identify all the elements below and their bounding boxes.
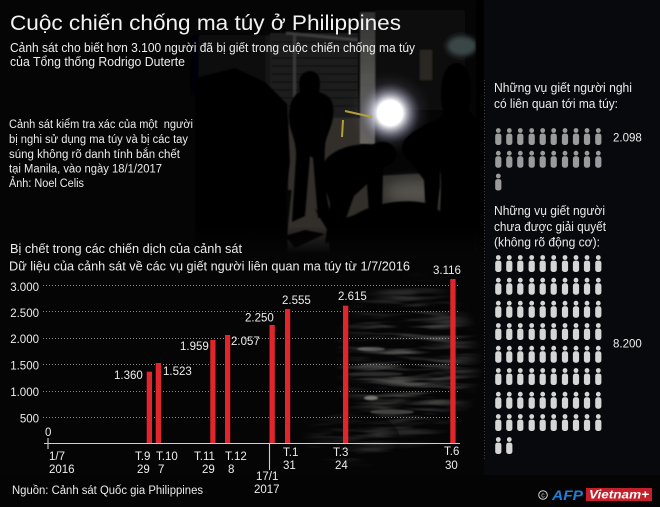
date labels: T.11 <box>194 451 215 463</box>
axis line <box>44 438 460 470</box>
fade photo into chart <box>0 226 484 254</box>
date labels: 29 <box>137 464 150 476</box>
bar value labels: 2.615 <box>338 291 367 303</box>
flashlight glow <box>348 71 432 155</box>
bar value labels: 3.116 <box>433 265 461 277</box>
subtitle: của Tổng thống Rodrigo Duterte <box>10 54 185 69</box>
yellow police tape <box>342 111 372 137</box>
silhouettes of police and the body <box>195 0 484 262</box>
date labels: 24 <box>335 460 348 472</box>
y axis labels <box>10 282 39 426</box>
logos: AFP and Vietnam+: c <box>541 492 545 500</box>
y axis labels: 2.000 <box>10 334 39 346</box>
bar value labels: 1.360 <box>114 370 143 382</box>
bar chart: police operation deaths <box>10 265 461 496</box>
y axis labels: 500 <box>20 414 39 426</box>
photo caption: bị nghi sử dụng ma túy và bị các tay <box>9 134 188 146</box>
heading: unsolved killings: Những vụ giết người <box>494 204 605 218</box>
date labels: T.12 <box>225 451 247 463</box>
heading: drug-related killings <box>494 81 632 111</box>
heading: unsolved killings <box>494 204 606 250</box>
photo caption: Ảnh: Noel Celis <box>9 177 84 190</box>
photo caption: tại Manila, vào ngày 18/1/2017 <box>9 164 162 176</box>
chart heading <box>9 241 410 274</box>
subtitle: Cảnh sát cho biết hơn 3.100 người đã bị giết trong cuộc chiến chống ma túy <box>10 40 415 55</box>
date labels <box>49 446 459 496</box>
value: 2.098: 2.098 <box>613 132 642 144</box>
source note: Nguồn: Cảnh sát Quốc gia Philippines <box>12 485 203 497</box>
heading: drug-related killings: Những vụ giết người nghi <box>494 81 632 95</box>
y axis labels: 1.000 <box>10 387 39 399</box>
pictogram: 2.098 drug-related killings <box>495 128 601 190</box>
bar value labels: 1.523 <box>163 366 192 378</box>
title: Cuộc chiến chống ma túy ở Philippines <box>10 11 401 35</box>
background photo: police at night scene <box>266 12 485 462</box>
date labels: 1/7 <box>49 451 65 463</box>
heading: unsolved killings: (không rõ động cơ): <box>494 236 600 250</box>
bar value labels: 2.057 <box>231 336 260 348</box>
ground texture <box>310 288 478 462</box>
y axis labels: 3.000 <box>10 282 39 294</box>
value: 8.200: 8.200 <box>613 338 642 350</box>
red bars <box>147 279 456 443</box>
chart heading: Dữ liệu của cảnh sát về các vụ giết người liên quan ma túy từ 1/7/2016 <box>9 258 410 274</box>
logos: AFP and Vietnam+ <box>539 487 652 503</box>
pictogram: 8.200 unsolved killings <box>495 255 601 454</box>
subtitle <box>10 40 415 69</box>
date labels: 7 <box>158 464 164 476</box>
heading: drug-related killings: có liên quan tới ma túy: <box>494 97 618 111</box>
date labels: 30 <box>445 460 458 472</box>
bar value labels: 2.555 <box>282 295 311 307</box>
date labels: T.9 <box>135 451 150 463</box>
date labels: 17/1 <box>256 471 278 483</box>
bar value labels: 2.250 <box>245 312 274 324</box>
photo caption: Cảnh sát kiểm tra xác của một người <box>9 119 193 131</box>
photo caption <box>9 119 193 190</box>
photo caption: súng không rõ danh tính bắn chết <box>9 148 181 161</box>
y axis labels: 1.500 <box>10 360 39 372</box>
bar value labels: 1.959 <box>180 341 209 353</box>
date labels: 2016 <box>49 464 75 476</box>
date labels: 29 <box>202 464 215 476</box>
heading: unsolved killings: chưa được giải quyết <box>494 220 606 234</box>
date labels: T.10 <box>156 451 178 463</box>
bar value labels <box>114 265 461 382</box>
date labels: T.3 <box>333 447 348 459</box>
date labels: 2017 <box>254 484 280 496</box>
logos: AFP and Vietnam+: Vietnam+ <box>589 490 649 502</box>
date labels: T.1 <box>283 447 298 459</box>
zero label: 0 <box>45 427 51 439</box>
chart heading: Bị chết trong các chiến dịch của cảnh sát <box>10 241 242 256</box>
y axis labels: 2.500 <box>10 308 39 320</box>
logos: AFP and Vietnam+: AFP <box>551 487 584 503</box>
date labels: T.6 <box>444 446 459 458</box>
date labels: 31 <box>283 460 296 472</box>
date labels: 8 <box>228 464 234 476</box>
